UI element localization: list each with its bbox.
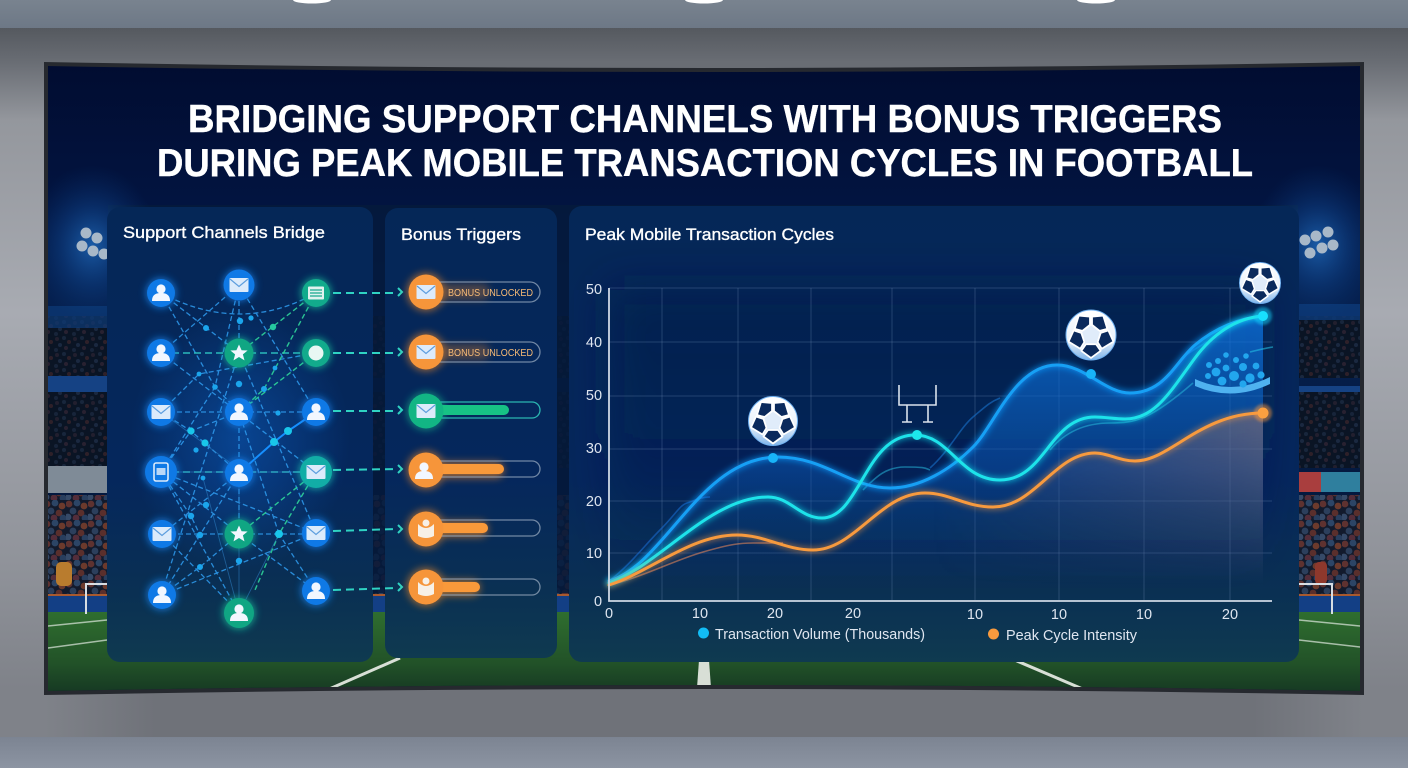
channel node: user <box>225 398 253 426</box>
channel node: message <box>302 279 330 307</box>
x axis labels: 10 <box>1051 607 1067 623</box>
channel node: bubble <box>302 339 330 367</box>
channel node: user <box>302 398 330 426</box>
channel node: mail <box>300 456 332 488</box>
y axis labels: 50 <box>586 388 602 404</box>
trigger row: bonus unlocked 1 <box>408 274 540 310</box>
heading: support channels bridge: Support Channels Bridge <box>123 223 325 242</box>
legend: transaction volume: Transaction Volume (Thousands) <box>715 627 925 643</box>
panel: peak mobile transaction cycles <box>569 206 1299 662</box>
screen frame <box>44 62 1364 695</box>
trigger row: bonus unlocked 1: BONUS UNLOCKED <box>448 288 533 299</box>
heading: peak mobile transaction cycles: Peak Mobile Transaction Cycles <box>585 225 834 244</box>
panel: support channels bridge <box>107 207 373 662</box>
data markers <box>768 307 1272 463</box>
channel node: chat <box>224 270 254 300</box>
trigger row: green progress <box>408 394 540 428</box>
x axis labels: 10 <box>1136 607 1152 623</box>
channel node: mail <box>148 520 176 548</box>
faint secondary curves <box>609 342 1273 585</box>
channel node: star <box>224 338 254 368</box>
channel node: user <box>147 279 175 307</box>
icon: goal post <box>899 385 936 422</box>
icon: right floodlight <box>1300 226 1338 258</box>
y axis labels: 30 <box>586 441 602 457</box>
floor <box>0 737 1408 768</box>
channel node: user <box>302 577 330 605</box>
ceiling band with lights <box>0 0 1408 28</box>
y axis labels: 50 <box>586 282 602 298</box>
channel node: user <box>225 459 253 487</box>
x axis labels: 20 <box>1222 607 1238 623</box>
channel node: user <box>148 581 176 609</box>
panel: bonus triggers <box>385 208 557 658</box>
title: BRIDGING SUPPORT CHANNELS WITH BONUS TRIGGERS <box>188 98 1222 141</box>
legend: peak cycle intensity: Peak Cycle Intensity <box>1006 628 1138 644</box>
network junction dots <box>187 315 292 570</box>
channel node: mobile <box>145 456 177 488</box>
channel node: user <box>224 598 254 628</box>
x axis labels: 10 <box>967 607 983 623</box>
icon: left floodlight <box>76 228 110 260</box>
y axis labels: 20 <box>586 494 602 510</box>
x axis labels: 20 <box>767 606 783 622</box>
title: DURING PEAK MOBILE TRANSACTION CYCLES IN FOOTBALL <box>157 142 1253 185</box>
area under transaction volume <box>609 316 1263 600</box>
trigger row: orange progress 1 <box>408 452 540 488</box>
trigger row: orange progress 2 <box>408 512 540 546</box>
trigger glows <box>407 273 504 606</box>
trigger row: bonus unlocked 2: BONUS UNLOCKED <box>448 348 533 359</box>
x axis labels: 0 <box>605 606 613 622</box>
trigger row: orange progress 3 <box>408 570 540 604</box>
icon: soccer ball 2 <box>1066 310 1116 360</box>
y axis labels: 10 <box>586 546 602 562</box>
channel node: mail <box>147 398 175 426</box>
icon: soccer ball 1 <box>748 396 798 446</box>
node glows <box>144 269 333 629</box>
line chart <box>586 262 1281 644</box>
channel node: star <box>224 520 254 548</box>
title <box>157 98 1253 185</box>
heading: bonus triggers: Bonus Triggers <box>401 225 521 244</box>
y axis labels: 0 <box>594 594 602 610</box>
arrows: channels to bonus triggers <box>333 288 402 591</box>
line: transaction volume <box>609 316 1263 581</box>
x axis labels: 10 <box>692 606 708 622</box>
x axis labels: 20 <box>845 606 861 622</box>
network connections <box>161 285 316 613</box>
line: cycle activity <box>609 316 1263 583</box>
icon: soccer ball 3 <box>1239 262 1281 304</box>
line: peak cycle intensity <box>609 413 1263 585</box>
channel node: user <box>147 339 175 367</box>
x axis labels <box>605 606 1238 623</box>
y axis labels <box>586 282 602 610</box>
chart axes <box>609 288 1272 601</box>
channel node: mail <box>302 519 330 547</box>
icon: stadium crowd <box>1195 352 1270 394</box>
trigger row: bonus unlocked 2 <box>408 334 540 370</box>
area under peak cycle intensity <box>1014 414 1263 566</box>
y axis labels: 40 <box>586 335 602 351</box>
chart grid <box>609 288 1272 600</box>
